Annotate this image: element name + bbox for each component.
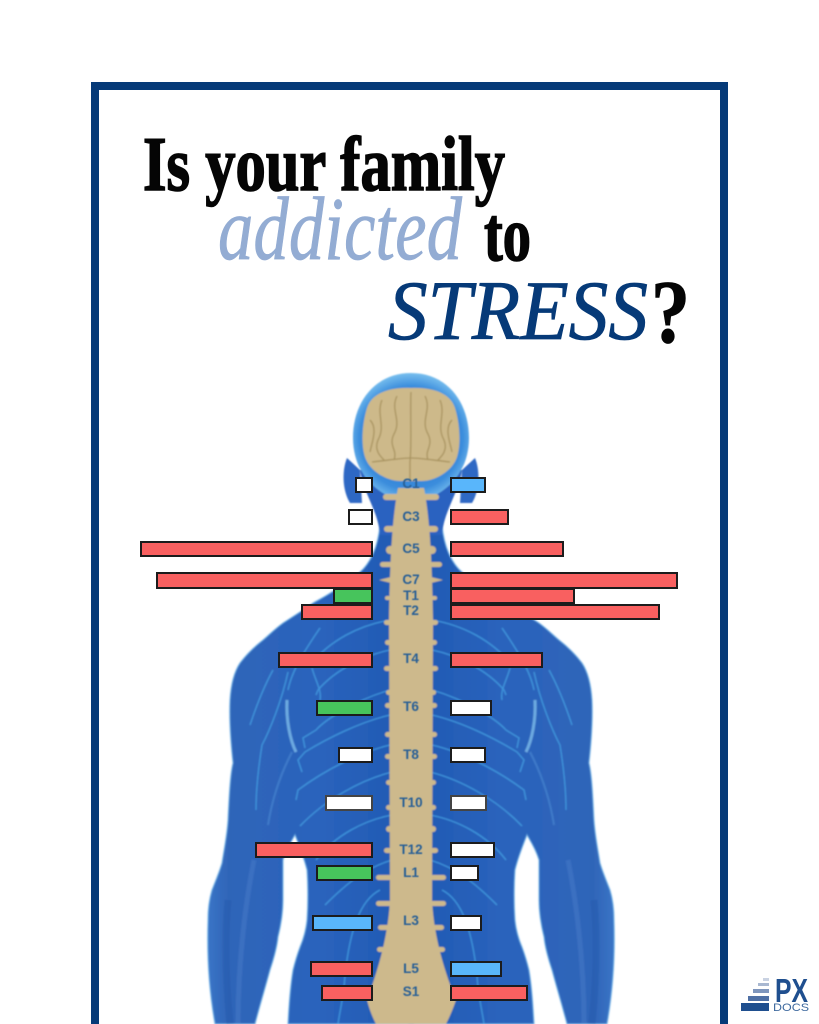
PX Docs logo — [741, 972, 809, 1014]
label T6: T6 — [403, 699, 419, 714]
label L1: L1 — [403, 865, 419, 880]
label C7: C7 — [402, 572, 420, 587]
title word: STRESS: STRESS — [388, 264, 648, 358]
label C5: C5 — [402, 541, 420, 556]
logo DOCS wordmark: DOCS — [773, 1002, 809, 1014]
title question mark: ? — [651, 263, 690, 362]
label C1: C1 — [402, 476, 420, 491]
label T10: T10 — [399, 795, 423, 810]
label L3: L3 — [403, 913, 419, 928]
vertebral processes — [376, 494, 446, 977]
title — [143, 121, 690, 362]
label C3: C3 — [402, 509, 420, 524]
anatomical figure — [208, 373, 614, 1024]
label L5: L5 — [403, 961, 419, 976]
head — [353, 373, 469, 496]
label S1: S1 — [403, 984, 420, 999]
title word: addicted: addicted — [218, 180, 463, 279]
vertebra labels — [399, 476, 423, 999]
label T2: T2 — [403, 603, 419, 618]
left bars — [141, 478, 372, 1000]
label T1: T1 — [403, 588, 419, 603]
title line 1: Is your family — [143, 121, 505, 207]
right bars — [451, 478, 677, 1000]
body right half — [409, 525, 614, 1024]
neck — [360, 470, 462, 535]
label T12: T12 — [399, 842, 423, 857]
spine — [367, 488, 456, 1024]
logo stair icon — [741, 978, 769, 1011]
page frame border — [95, 86, 724, 1024]
label T4: T4 — [403, 651, 419, 666]
label T8: T8 — [403, 747, 419, 762]
brain — [363, 388, 459, 481]
title word: to: to — [484, 191, 531, 277]
logo PX wordmark: PX — [775, 972, 808, 1009]
body left half — [208, 525, 413, 1024]
right ear — [460, 458, 478, 503]
left ear — [344, 458, 362, 503]
